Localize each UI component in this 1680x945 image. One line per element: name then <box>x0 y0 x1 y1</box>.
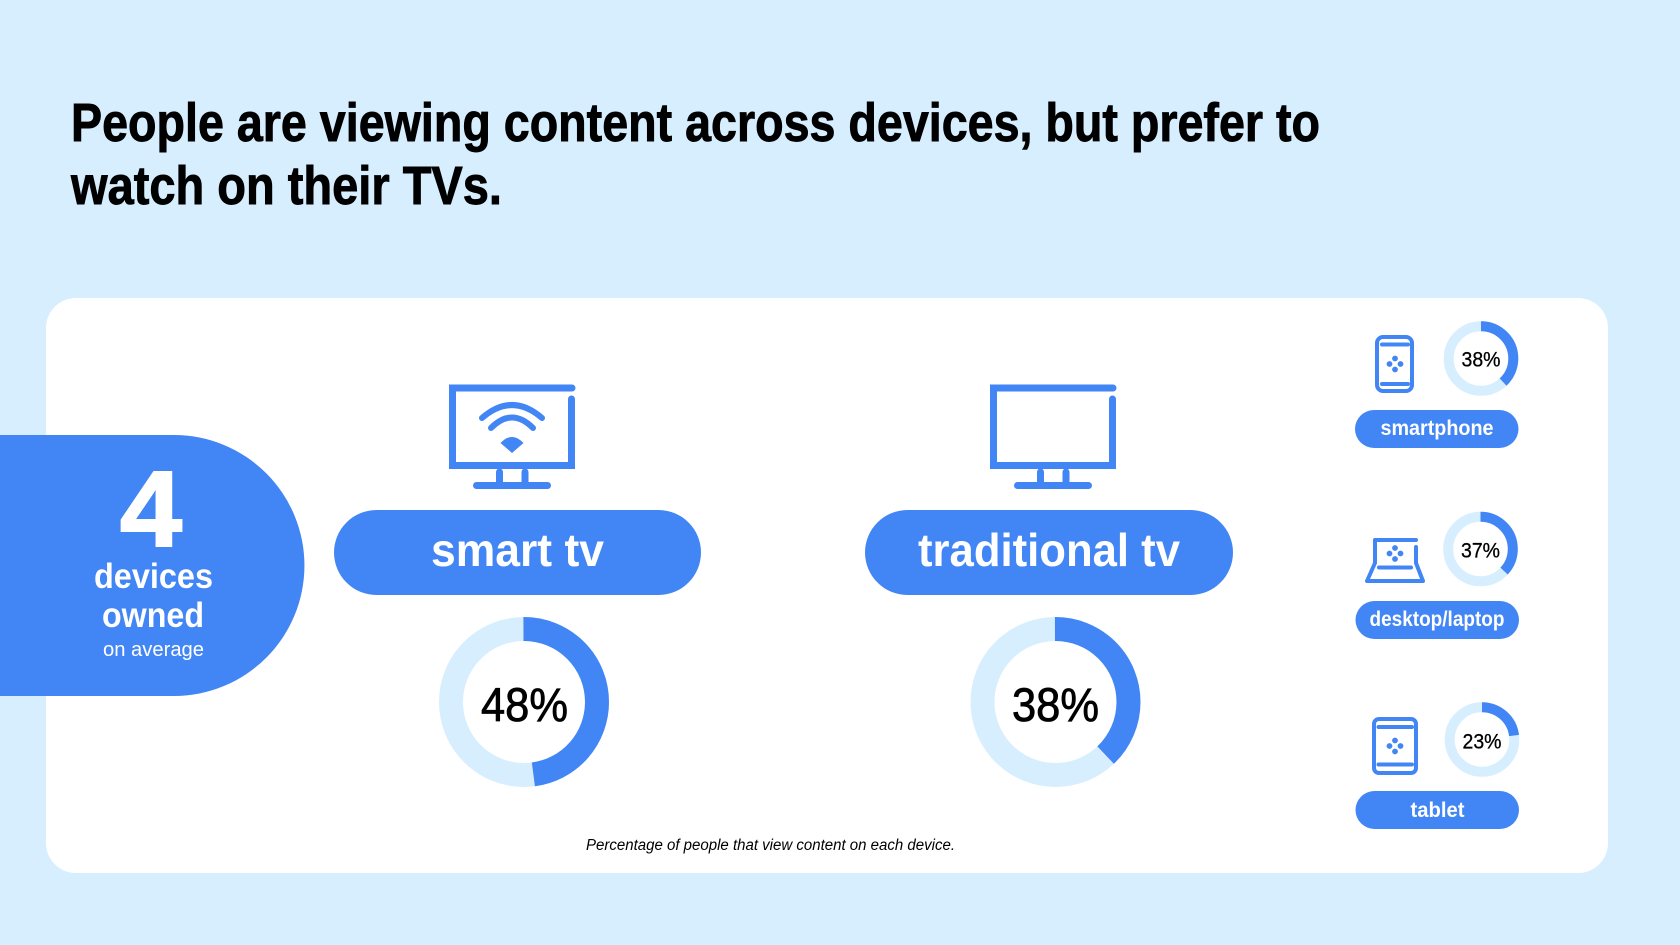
callout: 4 devices owned on average: on average <box>103 639 204 661</box>
label: smart tv <box>334 510 701 595</box>
label: smartphone <box>1355 410 1518 448</box>
donut: desktop/laptop 37% <box>1448 517 1513 581</box>
label: traditional tv <box>865 510 1233 595</box>
label: smartphone: smartphone <box>1380 417 1494 440</box>
label: tablet <box>1356 791 1519 829</box>
footnote: Percentage of people that view content on each device. <box>586 837 955 854</box>
donut: tablet 23%: 23% <box>1462 730 1502 754</box>
donut: smart tv 48% <box>451 629 597 775</box>
donut: smartphone 38%: 38% <box>1462 348 1500 372</box>
title <box>70 93 1320 216</box>
icon: laptop <box>1367 540 1423 581</box>
icon: tablet <box>1374 719 1416 773</box>
icon: smart tv <box>452 388 572 486</box>
callout: 4 devices owned on average: owned <box>102 596 204 635</box>
donut: smartphone 38% <box>1449 326 1513 391</box>
label: traditional tv: traditional tv <box>918 524 1180 576</box>
label: desktop/laptop: desktop/laptop <box>1370 608 1504 631</box>
callout: 4 devices owned on average <box>0 435 304 696</box>
label: smart tv: smart tv <box>431 524 604 576</box>
donut: smart tv 48%: 48% <box>481 678 568 731</box>
donut: tablet 23% <box>1450 707 1514 772</box>
icon: traditional tv <box>994 388 1113 486</box>
label: desktop/laptop <box>1356 601 1519 639</box>
icon: smartphone <box>1377 337 1412 391</box>
callout: 4 devices owned on average: 4 <box>120 448 182 569</box>
panel: main white card <box>46 298 1608 873</box>
donut: traditional tv 38%: 38% <box>1012 678 1099 731</box>
donut: traditional tv 38% <box>982 629 1128 775</box>
label: tablet: tablet <box>1410 799 1464 822</box>
donut: desktop/laptop 37%: 37% <box>1461 540 1500 562</box>
title: People are viewing content across devices, but prefer to <box>71 93 1320 153</box>
title: watch on their TVs. <box>70 156 502 216</box>
callout: 4 devices owned on average: devices <box>94 557 213 596</box>
